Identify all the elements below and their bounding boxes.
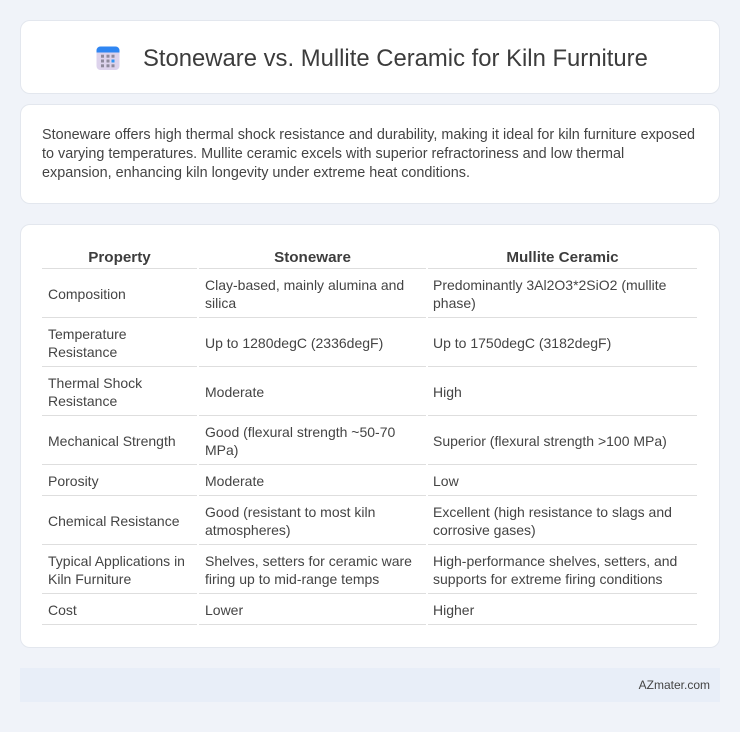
comparison table: Clay-based, mainly alumina and [205,277,404,293]
comparison table: Temperature [48,326,127,342]
comparison table: Composition [48,286,126,302]
comparison table: Higher [433,602,474,618]
intro card [20,104,720,204]
row: Cost [48,602,474,618]
comparison table: Cost [48,602,77,618]
comparison table: MPa) [205,442,238,458]
intro text [42,127,695,181]
comparison table: Excellent (high resistance to slags and [433,504,672,520]
intro text: expansion, enhancing kiln longevity under extreme heat conditions. [42,165,470,181]
intro text: to varying temperatures. Mullite ceramic excels with superior refractoriness and low thermal [42,146,624,162]
comparison table: Moderate [205,384,264,400]
column heading: Property: Property [88,249,151,266]
comparison table: corrosive gases) [433,522,536,538]
row: Mechanical Strength [48,424,667,458]
comparison table: Kiln Furniture [48,571,131,587]
row: Chemical Resistance [48,504,672,538]
comparison table: High-performance shelves, setters, and [433,553,677,569]
comparison table: Resistance [48,393,117,409]
comparison table: Thermal Shock [48,375,142,391]
comparison table: Low [433,473,459,489]
comparison table: High [433,384,462,400]
comparison table: phase) [433,295,476,311]
table card [20,224,720,648]
comparison table: Typical Applications in [48,553,185,569]
row: Typical Applications [48,553,677,587]
comparison table: Predominantly 3Al2O3*2SiO2 (mullite [433,277,666,293]
comparison table: Superior (flexural strength >100 MPa) [433,433,667,449]
row: Composition [48,277,666,311]
icon: calendar [96,46,120,70]
comparison table: Good (flexural strength ~50-70 [205,424,395,440]
column heading: Stoneware: Stoneware [274,249,351,266]
comparison table: firing up to mid-range temps [205,571,379,587]
comparison table: Chemical Resistance [48,513,180,529]
footer source: AZmater.com [639,678,710,692]
comparison table: Lower [205,602,243,618]
title: Stoneware vs. Mullite Ceramic for Kiln Furniture [143,45,648,72]
comparison table: Up to 1750degC (3182degF) [433,335,611,351]
comparison table: Resistance [48,344,117,360]
comparison table: supports for extreme firing conditions [433,571,663,587]
comparison table: Up to 1280degC (2336degF) [205,335,383,351]
footer bar [20,668,720,702]
column heading: Mullite Ceramic: Mullite Ceramic [506,249,619,266]
intro text: Stoneware offers high thermal shock resistance and durability, making it ideal for kiln furniture exposed [42,127,695,143]
comparison table: Moderate [205,473,264,489]
header card [20,20,720,94]
row: Temperature Resistance [48,326,611,360]
comparison table: Good (resistant to most kiln [205,504,375,520]
comparison table: Shelves, setters for ceramic ware [205,553,412,569]
comparison table: silica [205,295,236,311]
comparison table: atmospheres) [205,522,291,538]
row: Porosity [48,473,459,489]
comparison table: Porosity [48,473,99,489]
row: Thermal Shock Resistance [48,375,462,409]
comparison table: Mechanical Strength [48,433,176,449]
